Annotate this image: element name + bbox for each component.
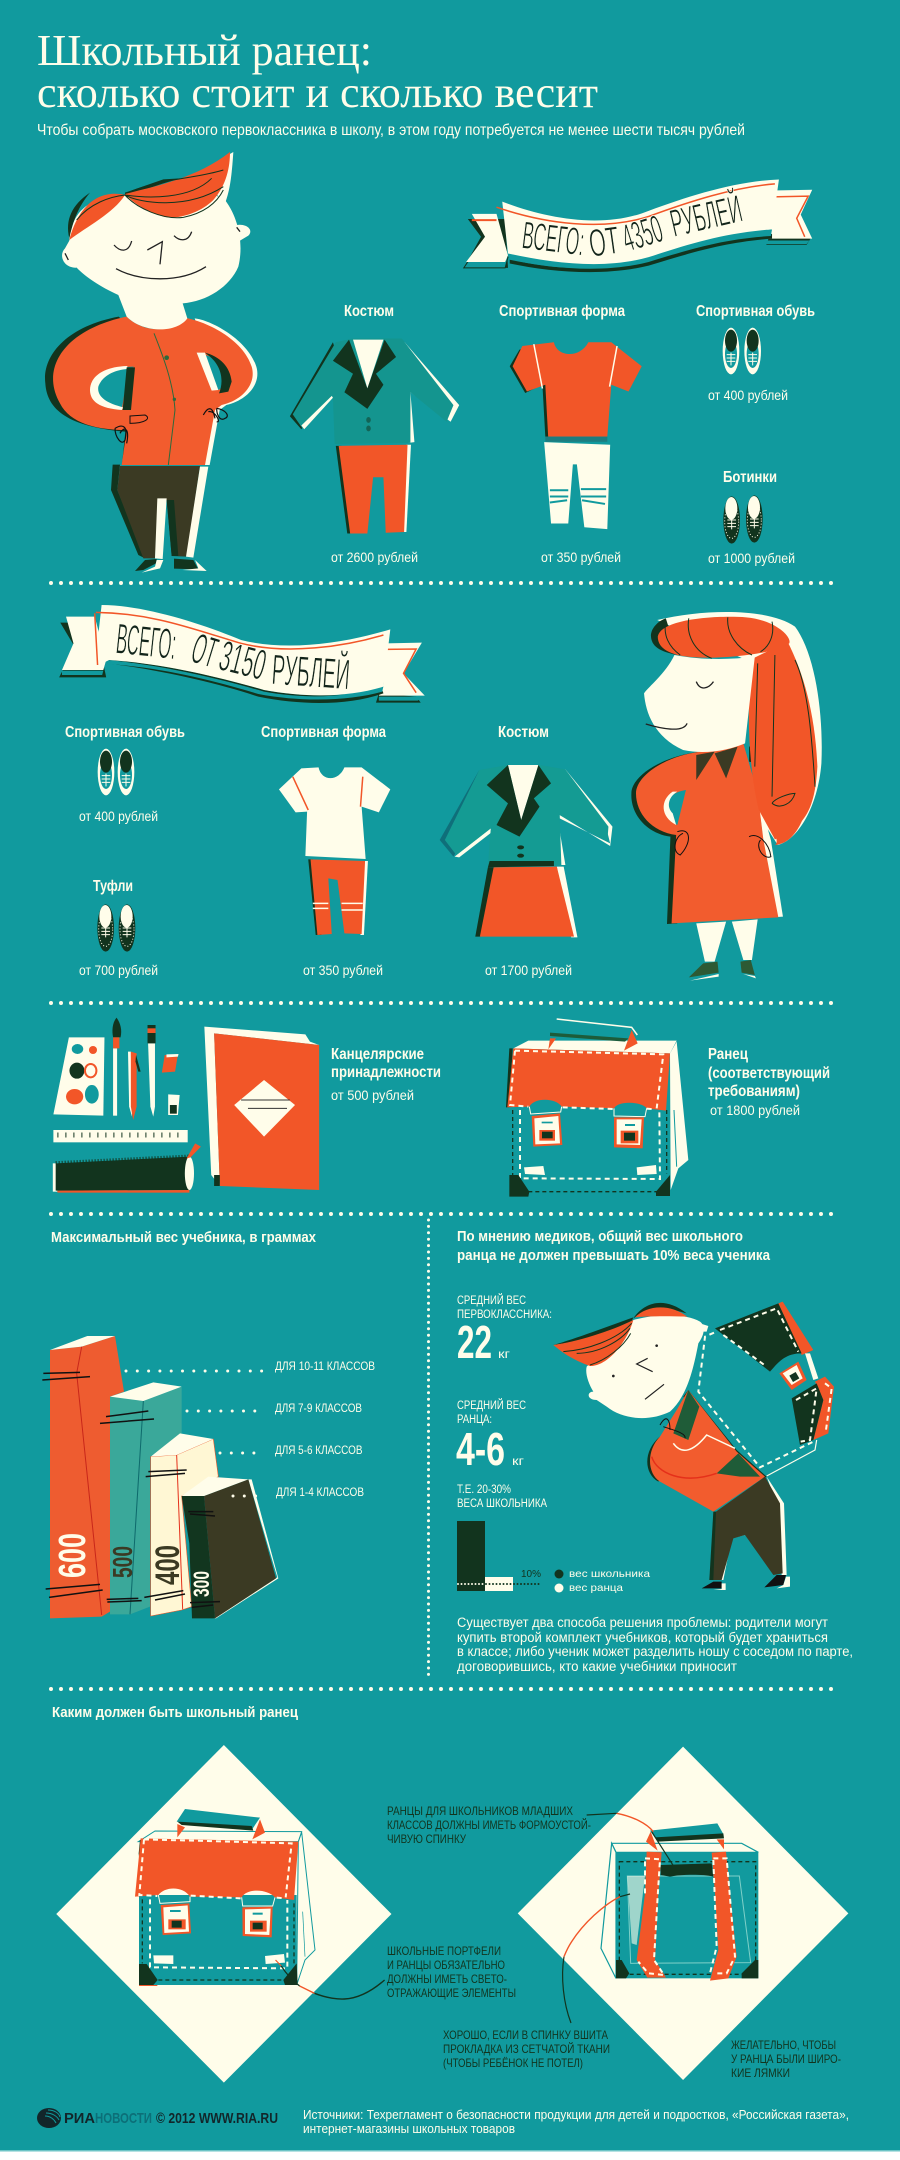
heading: what a school bag should be: Каким должен быть школьный ранец	[52, 1704, 299, 1721]
icon: girl sports uniform	[279, 767, 390, 935]
label: boots	[708, 469, 795, 566]
icon: sports shoes	[723, 328, 761, 374]
label: boots: от 1000 рублей	[708, 550, 795, 566]
callout: ergonomic back: КЛАССОВ ДОЛЖНЫ ИМЕТЬ ФОРМОУСТОЙ-	[387, 1817, 591, 1832]
icon: boy suit	[290, 339, 459, 534]
callout: ergonomic back: РАНЦЫ ДЛЯ ШКОЛЬНИКОВ МЛАДШИХ	[387, 1804, 573, 1818]
bar chart: bag share of weight: 10%	[521, 1569, 541, 1580]
label: shoes: Туфли	[93, 878, 133, 895]
text: school bag: (соответствующий	[708, 1065, 830, 1082]
panel: front view of school bag	[56, 1745, 391, 2083]
stat: bag weight	[456, 1399, 526, 1475]
banner: total 3150	[59, 605, 425, 703]
stat: first grader weight	[457, 1294, 552, 1368]
stat: bag weight: 4-6	[456, 1423, 505, 1475]
chart: textbook weights: 500	[107, 1546, 138, 1578]
label: girl sports shoes	[65, 724, 185, 824]
label: girl uniform	[261, 724, 386, 978]
logo: RIA Novosti: НОВОСТИ	[95, 2110, 152, 2127]
label: shoes	[79, 878, 158, 978]
stat: first grader weight: кг	[498, 1347, 511, 1361]
label: girl uniform: Спортивная форма	[261, 724, 386, 741]
connector: reflective elements	[276, 1960, 385, 1999]
text: stationery: Канцелярские	[331, 1046, 424, 1063]
stat: first grader weight: СРЕДНИЙ ВЕС	[457, 1294, 526, 1307]
callout: mesh padding	[443, 2028, 610, 2070]
bar chart: bag share of weight	[457, 1521, 541, 1591]
callout: wide straps: КИЕ ЛЯМКИ	[731, 2066, 790, 2080]
callout: mesh padding: (ЧТОБЫ РЕБЁНОК НЕ ПОТЕЛ)	[443, 2056, 583, 2070]
chart: textbook weights: ДЛЯ 10-11 КЛАССОВ	[275, 1361, 375, 1373]
label: shoes: от 700 рублей	[79, 962, 158, 978]
label: girl suit	[485, 724, 572, 978]
text: school bag	[708, 1046, 830, 1118]
label: suit price: от 2600 рублей	[331, 549, 418, 565]
paragraph: solutions: Существует два способа решения проблемы: родители могут	[457, 1615, 828, 1630]
chart: textbook weights: ДЛЯ 7-9 КЛАССОВ	[275, 1403, 362, 1415]
icon: shoes	[97, 904, 135, 952]
stat: first grader weight: ПЕРВОКЛАССНИКА:	[457, 1309, 552, 1321]
label: girl uniform: от 350 рублей	[303, 962, 383, 978]
chart: textbook weights	[42, 1336, 375, 1618]
banner: total 3150: 3150	[215, 632, 271, 690]
banner: total 3150: ВСЕГО:	[114, 615, 179, 669]
label: sports uniform: от 350 рублей	[541, 549, 621, 565]
illustration: school bag	[506, 1019, 688, 1197]
illustration: stationery	[53, 1018, 201, 1193]
paragraph: solutions: в классе; либо ученик может разделить ношу с соседом по парте,	[457, 1644, 853, 1659]
text: stationery: от 500 рублей	[331, 1087, 414, 1103]
connectors: back, padding	[563, 1813, 675, 2023]
stat: percent	[457, 1484, 547, 1510]
banner: total 3150: ОТ	[186, 625, 223, 678]
paragraph: solutions: купить второй комплект учебников, который будет храниться	[457, 1630, 828, 1645]
label: girl sports shoes: от 400 рублей	[79, 808, 158, 824]
stat: percent: Т.Е. 20-30%	[457, 1484, 511, 1496]
label: suit price: Костюм	[344, 303, 394, 320]
callout: reflective elements: И РАНЦЫ ОБЯЗАТЕЛЬНО	[387, 1958, 505, 1972]
bag back	[601, 1823, 758, 1981]
label: girl sports shoes: Спортивная обувь	[65, 724, 185, 741]
label: sports shoes: Спортивная обувь	[696, 303, 815, 320]
icon: boots	[723, 495, 763, 544]
sources: интернет-магазины школьных товаров	[303, 2121, 515, 2136]
illustration: girl	[631, 612, 822, 981]
paragraph: solutions: договорившись, кто какие учебники приносит	[457, 1659, 737, 1674]
heading: doctors' opinion: По мнению медиков, общий вес школьного	[457, 1229, 743, 1245]
label: sports uniform	[499, 303, 625, 565]
callout: reflective elements: ШКОЛЬНЫЕ ПОРТФЕЛИ	[387, 1944, 501, 1958]
text: school bag: Ранец	[708, 1046, 748, 1063]
title: сколько стоит и сколько весит	[37, 68, 598, 117]
chart: textbook weights: ДЛЯ 1-4 КЛАССОВ	[276, 1487, 364, 1499]
callout: wide straps	[731, 2038, 841, 2080]
callout: reflective elements: ОТРАЖАЮЩИЕ ЭЛЕМЕНТЫ	[387, 1986, 516, 2000]
title	[37, 26, 598, 117]
icon: notebook	[204, 1027, 319, 1190]
label: sports shoes: от 400 рублей	[708, 387, 788, 403]
banner: total 4350: ОТ	[586, 219, 622, 266]
heading: doctors' opinion	[457, 1229, 771, 1264]
text: stationery: принадлежности	[331, 1064, 441, 1081]
heading: textbook weight: Максимальный вес учебника, в граммах	[51, 1230, 316, 1246]
banner: total 4350	[464, 179, 812, 272]
stat: bag weight: РАНЦА:	[457, 1414, 492, 1426]
legend: вес школьника	[569, 1568, 650, 1580]
chart: textbook weights: 400	[149, 1545, 187, 1585]
chart: textbook weights: ДЛЯ 5-6 КЛАССОВ	[275, 1445, 363, 1457]
title: Школьный ранец:	[37, 26, 372, 75]
stat: bag weight: кг	[512, 1454, 525, 1468]
callout: wide straps: У РАНЦА БЫЛИ ШИРО-	[731, 2052, 841, 2066]
bag front	[135, 1809, 315, 1986]
sources: Источники: Техрегламент о безопасности продукции для детей и подростков, «Российская газета»,	[303, 2107, 849, 2122]
logo: RIA Novosti: РИА	[64, 2110, 95, 2127]
label: sports shoes	[696, 303, 815, 403]
legend	[554, 1568, 650, 1594]
stat: bag weight: СРЕДНИЙ ВЕС	[457, 1399, 526, 1412]
callout: mesh padding: ХОРОШО, ЕСЛИ В СПИНКУ ВШИТА	[443, 2028, 608, 2042]
callout: wide straps: ЖЕЛАТЕЛЬНО, ЧТОБЫ	[731, 2038, 836, 2052]
label: girl suit: Костюм	[498, 724, 549, 741]
sources	[303, 2107, 849, 2136]
banner: total 3150: РУБЛЕЙ	[270, 645, 352, 699]
callout: ergonomic back	[387, 1804, 591, 1846]
text: school bag: от 1800 рублей	[710, 1102, 800, 1118]
chart: textbook weights: 300	[189, 1571, 214, 1597]
label: girl suit: от 1700 рублей	[485, 962, 572, 978]
callout: reflective elements	[387, 1944, 516, 2000]
subtitle: Чтобы собрать московского первоклассника в школу, в этом году потребуется не менее шести тысяч рублей	[37, 122, 745, 139]
label: boots: Ботинки	[723, 469, 777, 486]
icon: boy sports uniform	[510, 342, 642, 529]
callout: ergonomic back: ЧИВУЮ СПИНКУ	[387, 1832, 466, 1846]
label: sports uniform: Спортивная форма	[499, 303, 625, 320]
logo: RIA Novosti	[37, 2108, 278, 2128]
icon: girl sports shoes	[98, 749, 134, 795]
illustration: boy	[45, 152, 257, 573]
legend: вес ранца	[569, 1582, 623, 1594]
callout: reflective elements: ДОЛЖНЫ ИМЕТЬ СВЕТО-	[387, 1972, 507, 1986]
paragraph: solutions	[457, 1615, 853, 1674]
callout: mesh padding: ПРОКЛАДКА ИЗ СЕТЧАТОЙ ТКАНИ	[443, 2041, 610, 2056]
panel: back view of school bag	[518, 1747, 848, 2080]
heading: doctors' opinion: ранца не должен превышать 10% веса ученика	[457, 1248, 771, 1264]
stat: percent: ВЕСА ШКОЛЬНИКА	[457, 1498, 547, 1510]
icon: girl suit	[440, 765, 612, 937]
text: stationery	[331, 1046, 441, 1103]
banner: total 4350: ВСЕГО:	[520, 214, 587, 264]
banner: total 4350: РУБЛЕЙ	[666, 186, 746, 246]
banner: total 4350: 4350	[617, 208, 668, 261]
text: school bag: требованиям)	[708, 1083, 800, 1100]
stat: first grader weight: 22	[457, 1316, 492, 1368]
illustration: boy bending under bag	[553, 1302, 834, 1590]
label: suit price	[331, 303, 418, 565]
logo: RIA Novosti: © 2012 WWW.RIA.RU	[156, 2110, 278, 2127]
chart: textbook weights: 600	[52, 1533, 94, 1578]
